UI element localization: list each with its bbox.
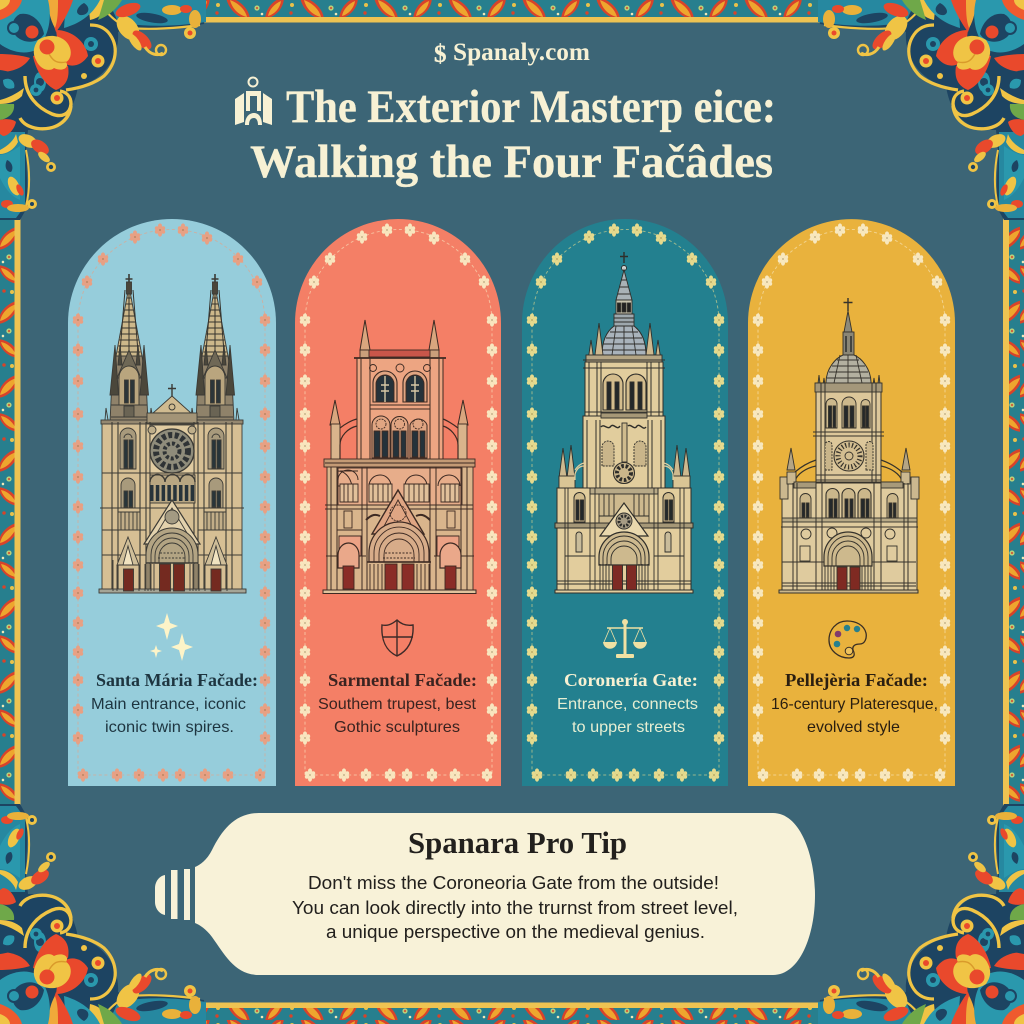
side portals [117, 537, 139, 565]
card text: 16-century Plateresque, [771, 696, 938, 713]
tip body text: a unique perspective on the medieval genius. [326, 921, 705, 942]
side pinnacles and buttresses [787, 448, 910, 470]
cathedral illustration: square tower [323, 320, 476, 594]
panel: pro tip lightbulb [155, 813, 815, 975]
brand line: $ [434, 41, 446, 68]
upper tower [357, 358, 443, 460]
icon: palette [829, 621, 866, 658]
panel: Santa María façade [68, 219, 276, 786]
floral corner: bottom left [0, 804, 206, 1024]
icon: shield [382, 620, 413, 656]
icon: scales [603, 619, 647, 658]
central gable [144, 500, 200, 544]
lower body [557, 488, 691, 591]
icon: bulb base stripes [155, 869, 190, 920]
floral corner: top left [0, 0, 206, 220]
title [250, 81, 776, 188]
tip body text [292, 872, 738, 942]
tower [816, 383, 881, 487]
card text: Entrance, connects [557, 696, 698, 713]
floral corner: top right [818, 0, 1024, 220]
cathedral illustration: domed tower [555, 252, 693, 593]
lower body [782, 482, 917, 591]
brand line: Spanaly.com [453, 39, 590, 66]
title: Walking the Four Fačâdes [250, 136, 773, 188]
tip body text: Don't miss the Coroneoria Gate from the outside! [308, 872, 719, 893]
card text: iconic twin spires. [105, 719, 234, 736]
card text: Santa Mária Fačade: [96, 670, 258, 690]
panel: Sarmental façade [295, 219, 501, 786]
cathedral illustration: dome and rose window [779, 298, 919, 593]
card text: to upper streets [572, 719, 685, 736]
side pinnacles [559, 445, 690, 478]
portal [824, 532, 872, 566]
portal [369, 522, 429, 562]
cathedral illustration: twin spires [99, 274, 246, 593]
card text: Gothic sculptures [334, 719, 460, 736]
central gable [372, 490, 424, 534]
card text [91, 670, 258, 736]
title: The Exterior Masterp eice: [286, 81, 776, 133]
card text [771, 670, 938, 736]
side portals [338, 543, 359, 568]
panel: Pellejería façade [748, 219, 955, 786]
panel: Coronería gate [522, 219, 728, 786]
tip body text: You can look directly into the trurnst from street level, [292, 897, 738, 918]
portal [146, 528, 198, 563]
gallery [150, 475, 195, 503]
card text: Coronería Gate: [564, 670, 698, 690]
card text: Pellejèria Fačade: [785, 670, 928, 690]
card text: Sarmental Fačade: [328, 670, 477, 690]
card text [318, 670, 477, 736]
portal [599, 532, 649, 565]
central gable [600, 503, 648, 536]
card text: Southem trupest, best [318, 696, 477, 713]
tower [585, 362, 663, 416]
icon: sparkles [150, 613, 193, 661]
pinnacles [330, 320, 468, 425]
floral corner: bottom right [818, 804, 1024, 1024]
lower body [327, 460, 473, 590]
icon: cathedral figure [235, 78, 272, 125]
side windows [120, 428, 224, 469]
card text [557, 670, 698, 736]
card text: evolved style [807, 719, 900, 736]
card text: Main entrance, iconic [91, 696, 246, 713]
tip heading: Spanara Pro Tip [408, 825, 627, 860]
lower windows [121, 478, 223, 508]
